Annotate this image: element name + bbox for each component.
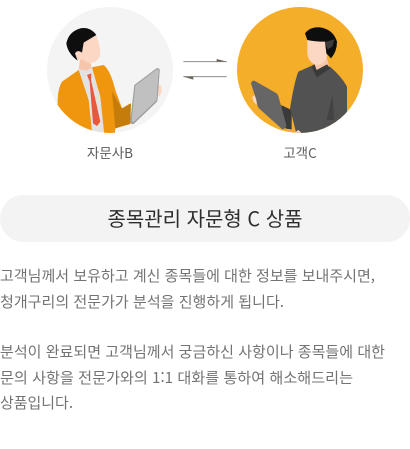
text block: first paragraph: [0, 265, 375, 312]
text block: second paragraph: [0, 341, 385, 413]
label: client C: 고객C: [283, 142, 317, 162]
icon: client C in orange circle: [237, 7, 363, 135]
text block: first paragraph: 청개구리의 전문가가 분석을 진행하게 됩니다.: [0, 291, 284, 312]
heading panel: [0, 195, 410, 242]
label: advisor B: 자문사B: [87, 142, 133, 162]
text block: second paragraph: 분석이 완료되면 고객님께서 궁금하신 사항이나 종목들에 대한: [0, 341, 385, 362]
text block: second paragraph: 상품입니다.: [0, 392, 73, 413]
text block: first paragraph: 고객님께서 보유하고 계신 종목들에 대한 정보를 보내주시면,: [0, 265, 375, 286]
icon: exchange arrows: [183, 59, 227, 80]
icon: advisor B in grey circle: [47, 7, 173, 135]
text block: second paragraph: 문의 사항을 전문가와의 1:1 대화를 통하여 해소해드리는: [0, 367, 353, 388]
heading text: 종목관리 자문형 C 상품: [108, 203, 302, 232]
